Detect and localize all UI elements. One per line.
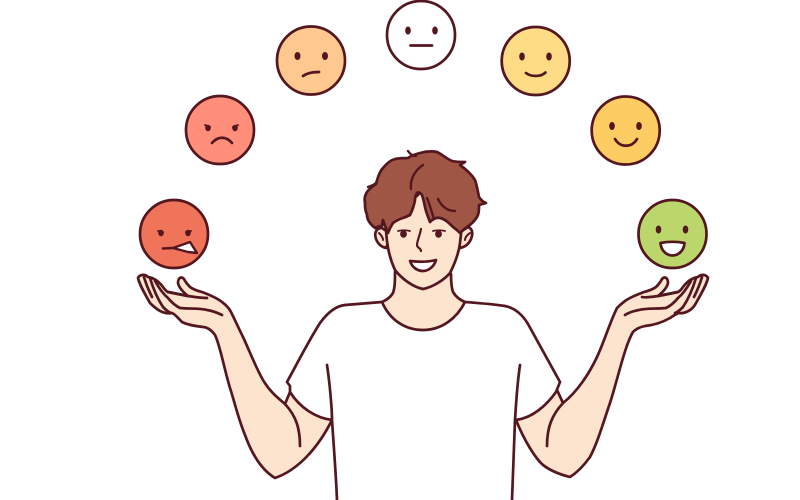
nose: [417, 229, 421, 251]
eyes: [398, 230, 445, 238]
emoji: delighted: [638, 200, 706, 268]
emoji: content: [502, 27, 570, 95]
face: [386, 190, 462, 289]
emoji: furious: [140, 200, 208, 268]
hair: [365, 151, 486, 233]
emoji: happy: [592, 96, 660, 164]
ears: [375, 228, 392, 248]
head: [365, 151, 486, 289]
neck: [382, 268, 465, 330]
right arm: [516, 275, 708, 477]
emoji: unhappy: [277, 26, 345, 94]
emoji: angry: [186, 96, 254, 164]
left arm: [138, 275, 332, 478]
t-shirt: [287, 302, 560, 500]
mouth: [410, 260, 436, 271]
person: [138, 151, 708, 500]
emoji scale: [140, 1, 706, 268]
emoji: neutral: [387, 1, 455, 69]
